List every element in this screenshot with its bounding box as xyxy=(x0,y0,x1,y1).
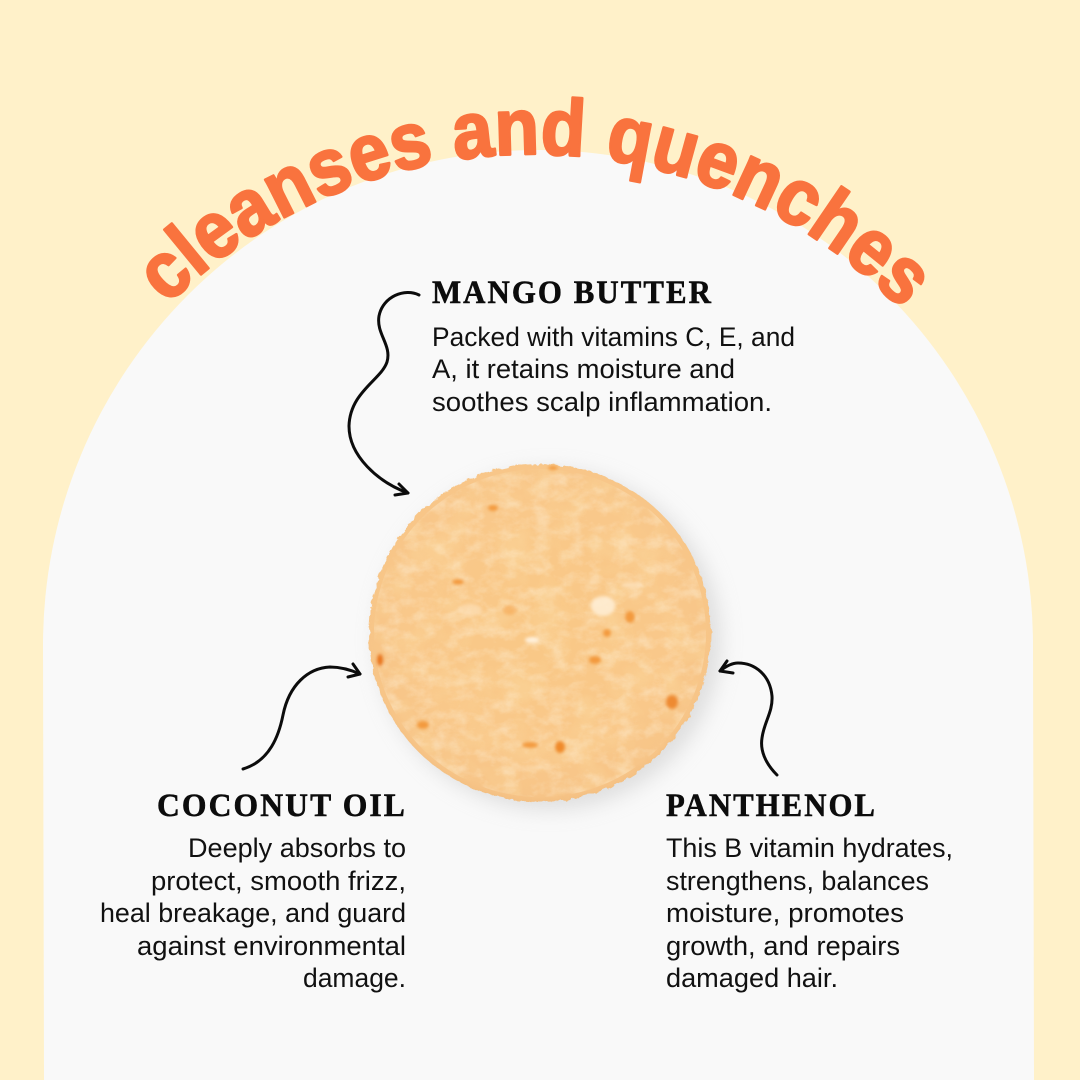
callout: coconut oil: COCONUT OIL xyxy=(157,787,407,823)
callout: coconut oil: against environmental xyxy=(137,931,406,961)
arrow: panthenol xyxy=(720,661,777,775)
panel: white arch xyxy=(43,150,1034,1080)
callout: panthenol: strengthens, balances xyxy=(666,866,929,896)
callout: mango butter: Packed with vitamins C, E, and xyxy=(432,322,795,352)
callout: mango butter xyxy=(432,274,795,417)
callout: panthenol: This B vitamin hydrates, xyxy=(666,833,953,863)
callout: panthenol: growth, and repairs xyxy=(666,931,900,961)
title: cleanses and quenches xyxy=(146,96,924,304)
product: shampoo bar xyxy=(369,464,721,810)
callout: panthenol: PANTHENOL xyxy=(666,787,877,823)
arrow: mango butter xyxy=(349,293,419,495)
arrow: coconut oil xyxy=(243,664,360,769)
callout: coconut oil: protect, smooth frizz, xyxy=(151,866,406,896)
callout: panthenol: damaged hair. xyxy=(666,963,838,993)
callout: panthenol xyxy=(666,787,953,993)
callout: coconut oil xyxy=(100,787,407,993)
callout: coconut oil: heal breakage, and guard xyxy=(100,898,406,928)
callout: mango butter: soothes scalp inflammation. xyxy=(432,387,772,417)
callout: mango butter: MANGO BUTTER xyxy=(432,274,713,310)
callout: coconut oil: damage. xyxy=(303,963,406,993)
callout: coconut oil: Deeply absorbs to xyxy=(188,833,406,863)
callout: mango butter: A, it retains moisture and xyxy=(432,354,735,384)
callout: panthenol: moisture, promotes xyxy=(666,898,904,928)
